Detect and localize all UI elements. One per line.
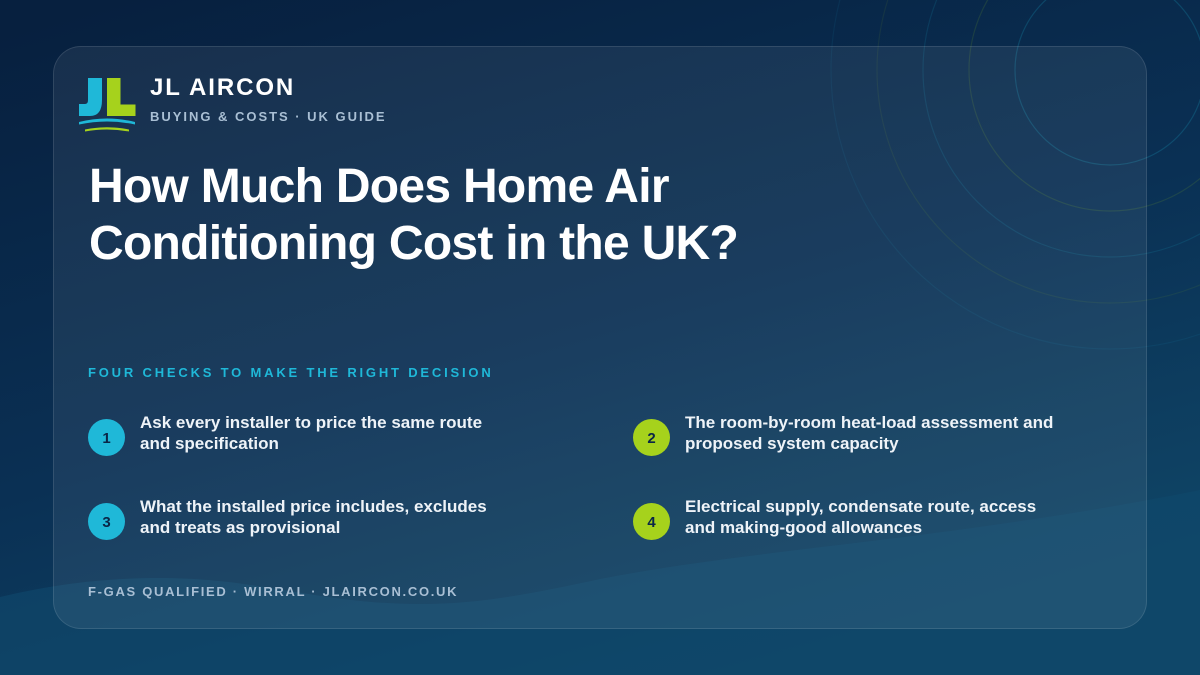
- badge 2: 2: [647, 430, 656, 447]
- check 4 text: Electrical supply, condensate route, access: [685, 497, 1036, 516]
- check 1: [88, 413, 482, 456]
- badge 4: 4: [647, 514, 656, 531]
- brand subtitle: BUYING & COSTS · UK GUIDE: [150, 109, 387, 124]
- footer: F-GAS QUALIFIED · WIRRAL · JLAIRCON.CO.UK: [88, 584, 458, 599]
- title: How Much Does Home Air: [89, 160, 669, 213]
- check 1 text: and specification: [140, 434, 279, 453]
- badge 2: [633, 419, 670, 456]
- check 4 text: [685, 497, 1036, 537]
- badge 3: [88, 503, 125, 540]
- title: Conditioning Cost in the UK?: [89, 217, 738, 270]
- title: [89, 160, 738, 270]
- icon: JL logo: [79, 78, 136, 132]
- check 1 text: [140, 413, 482, 453]
- check 3: [88, 497, 487, 540]
- check 1 text: Ask every installer to price the same route: [140, 413, 482, 432]
- badge 4: [633, 503, 670, 540]
- check 2: [633, 413, 1053, 456]
- check 2 text: The room-by-room heat-load assessment and: [685, 413, 1053, 432]
- check 2 text: [685, 413, 1053, 453]
- section heading: FOUR CHECKS TO MAKE THE RIGHT DECISION: [88, 365, 494, 380]
- check 3 text: [140, 497, 487, 537]
- check 4: [633, 497, 1036, 540]
- check 2 text: proposed system capacity: [685, 434, 899, 453]
- check 3 text: What the installed price includes, excludes: [140, 497, 487, 516]
- panel: main card: [53, 46, 1147, 629]
- badge 1: 1: [102, 430, 111, 447]
- check 3 text: and treats as provisional: [140, 518, 340, 537]
- check 4 text: and making-good allowances: [685, 518, 922, 537]
- brand name: JL AIRCON: [150, 74, 295, 101]
- badge 1: [88, 419, 125, 456]
- badge 3: 3: [102, 514, 111, 531]
